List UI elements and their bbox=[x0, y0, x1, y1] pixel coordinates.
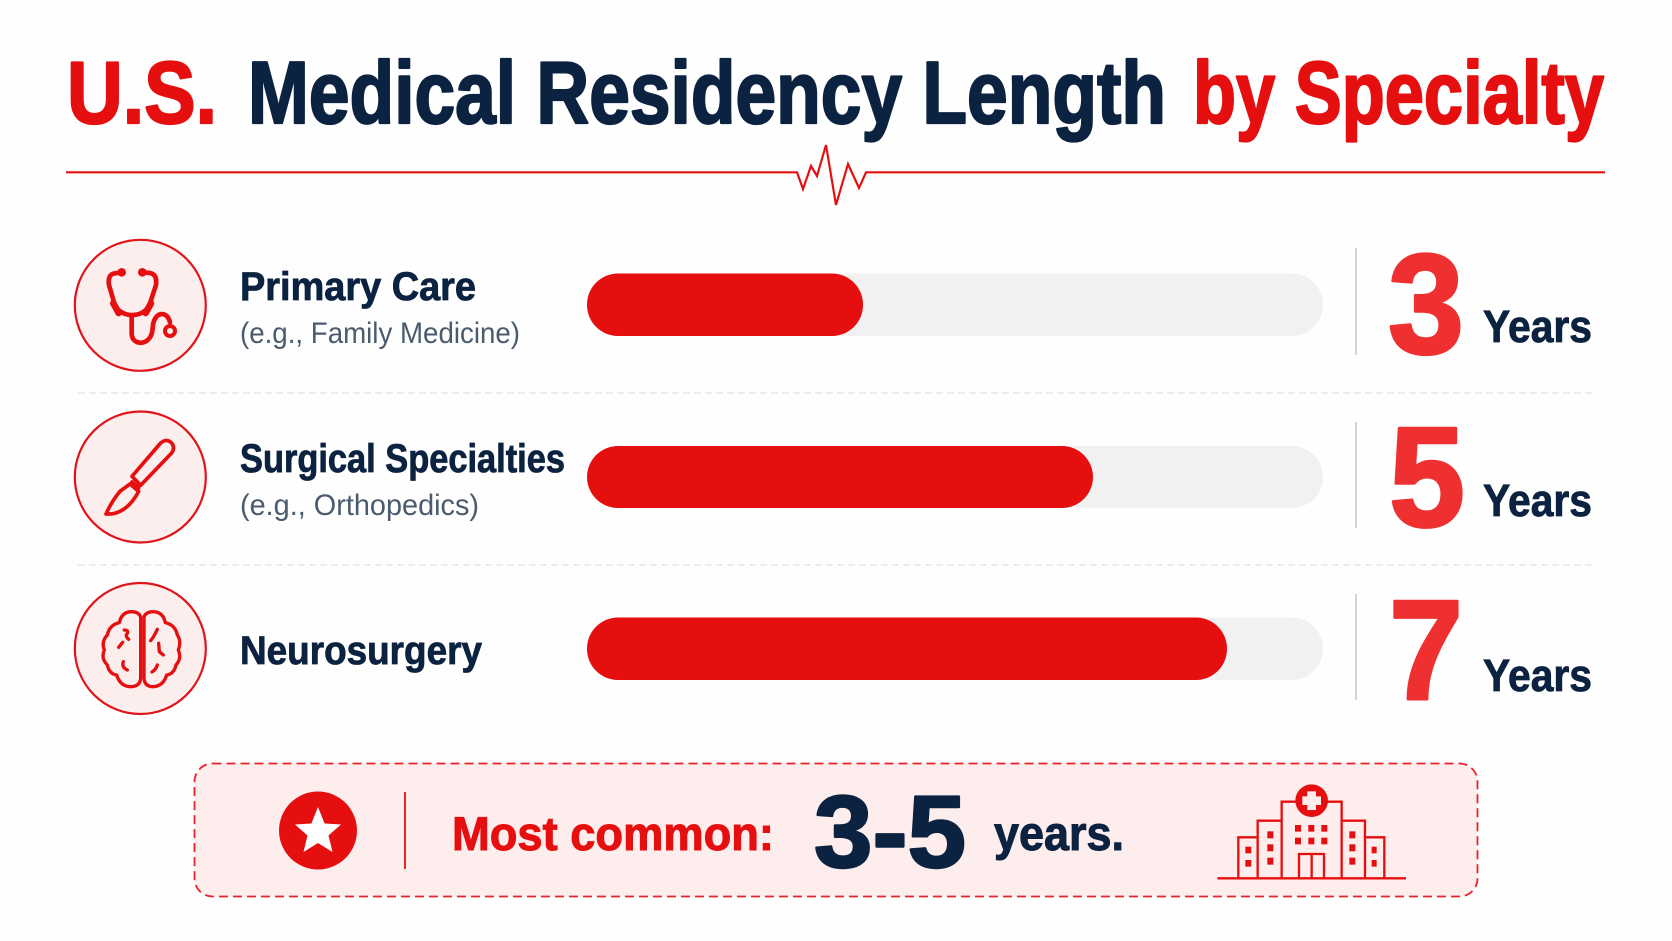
value: 5 years: 5 bbox=[1389, 398, 1465, 557]
value: 3 years: Years bbox=[1483, 301, 1592, 352]
callout label: Most common: bbox=[452, 807, 774, 860]
bar: 5 years bbox=[587, 446, 1323, 508]
callout value: 3-5 bbox=[814, 775, 966, 889]
title: U.S. bbox=[67, 43, 217, 142]
value: 5 years: Years bbox=[1483, 475, 1592, 526]
label: neurosurgery: Neurosurgery bbox=[240, 629, 483, 673]
icon: hospital bbox=[1217, 784, 1406, 878]
icon: stethoscope bbox=[75, 240, 206, 371]
icon: scalpel bbox=[75, 412, 206, 542]
label: primary care: Primary Care bbox=[240, 265, 476, 309]
row: neurosurgery bbox=[75, 571, 1592, 730]
callout: most common bbox=[194, 764, 1478, 896]
icon: brain bbox=[75, 583, 206, 714]
heartbeat divider bbox=[66, 145, 1605, 205]
sublabel: family medicine: (e.g., Family Medicine) bbox=[240, 317, 520, 350]
value: 3 years: 3 bbox=[1388, 225, 1464, 384]
icon: star badge bbox=[279, 792, 357, 870]
title: Medical Residency Length bbox=[248, 43, 1166, 142]
row: primary care bbox=[75, 225, 1592, 384]
row: surgical specialties bbox=[75, 398, 1592, 557]
value: 7 years bbox=[1389, 571, 1592, 730]
value: 5 years bbox=[1389, 398, 1592, 557]
label: surgical specialties: Surgical Specialties bbox=[240, 437, 565, 481]
value: 7 years: 7 bbox=[1389, 571, 1463, 730]
value: 3 years bbox=[1388, 225, 1592, 384]
value: 7 years: Years bbox=[1483, 650, 1592, 701]
bar: 7 years bbox=[587, 618, 1323, 680]
callout unit: years. bbox=[994, 808, 1124, 861]
sublabel: orthopedics: (e.g., Orthopedics) bbox=[240, 489, 479, 522]
bar: 3 years bbox=[587, 274, 1323, 336]
